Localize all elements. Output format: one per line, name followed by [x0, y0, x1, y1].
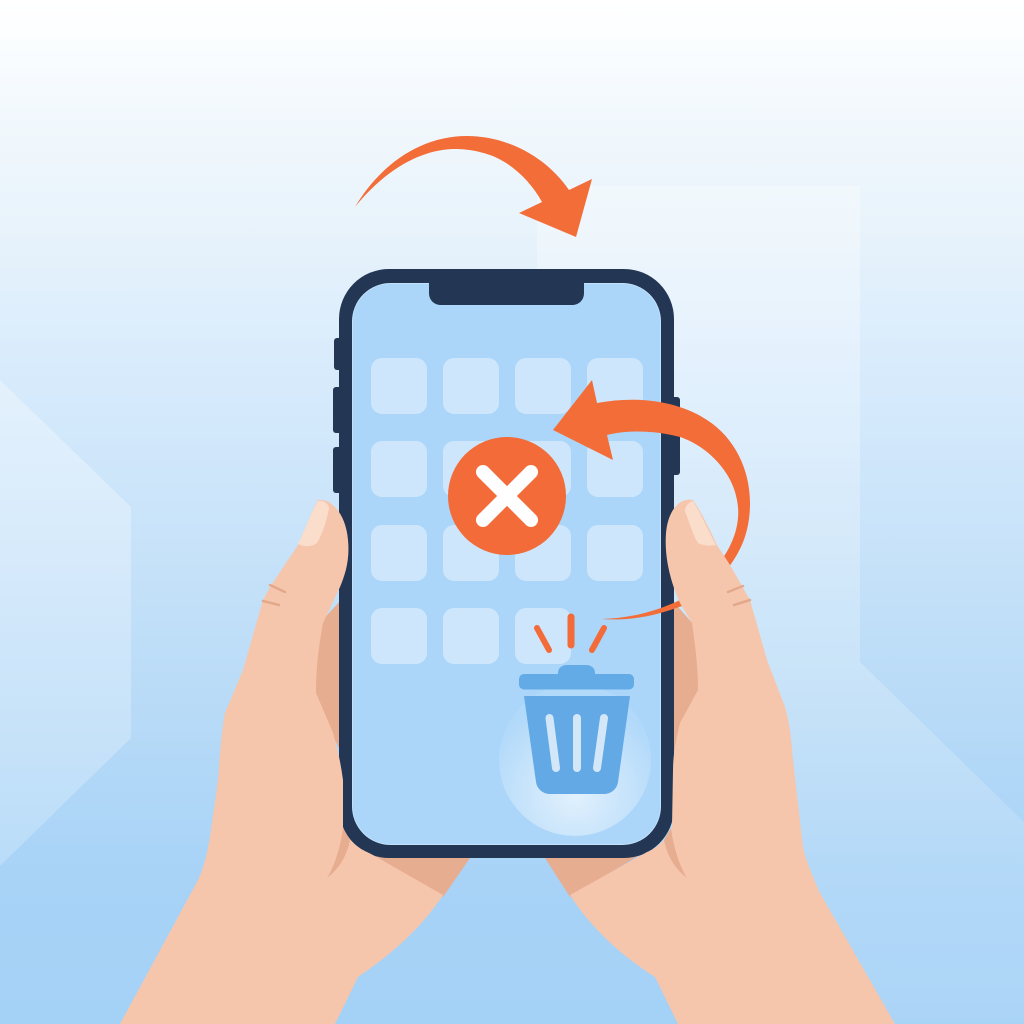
sparks above trash can	[537, 617, 604, 650]
app icon grid	[371, 358, 643, 664]
right palm shadow	[545, 600, 702, 897]
side buttons	[333, 338, 680, 493]
notch	[429, 283, 584, 305]
right curved arrow	[553, 380, 750, 619]
left palm shadow	[312, 600, 470, 897]
delete badge	[448, 437, 566, 555]
screen	[352, 284, 660, 844]
left thumbnail	[298, 501, 329, 546]
top arrow	[355, 136, 592, 237]
left palm fold	[327, 828, 350, 878]
right hand	[570, 500, 895, 1024]
right palm fold	[664, 828, 687, 878]
left hand	[120, 500, 443, 1024]
trash can icon	[499, 665, 651, 836]
left knuckle creases	[263, 585, 285, 605]
phone	[333, 269, 680, 858]
right thumbnail	[685, 501, 716, 546]
right knuckle creases	[728, 586, 750, 605]
phone body	[339, 269, 674, 858]
